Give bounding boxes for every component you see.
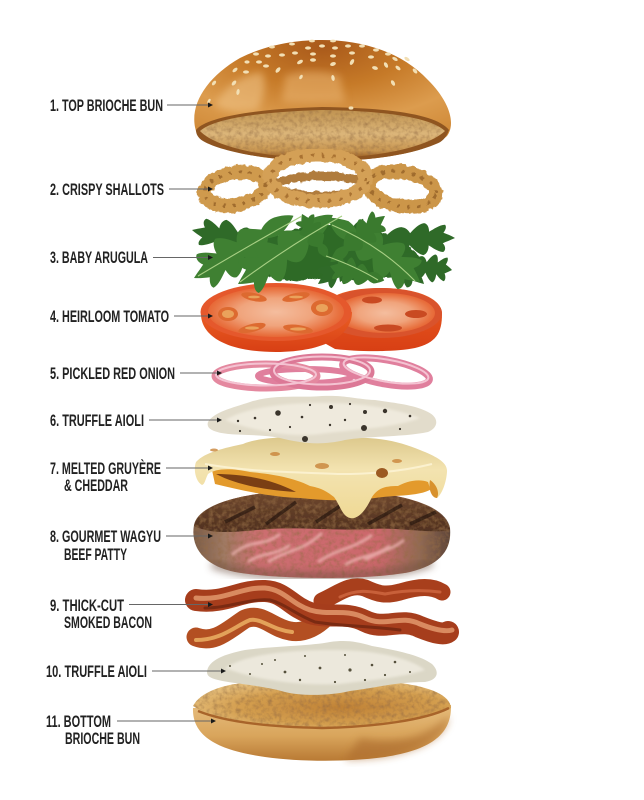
label 2: crispy shallots: 2. CRISPY SHALLOTS [50,181,164,199]
label 11: bottom brioche bun: 11. BOTTOM [46,713,111,731]
crispy shallots [202,155,438,212]
truffle aioli layer 6 [208,396,436,443]
label 7: melted gruyere and cheddar: & CHEDDAR [64,477,128,495]
top brioche bun [194,40,451,161]
melted gruyere and cheddar [195,437,447,518]
label 9: thick-cut smoked bacon: 9. THICK-CUT [50,597,124,615]
thick-cut smoked bacon [196,587,452,640]
label 7: melted gruyere and cheddar: 7. MELTED GRUYÈRE [50,459,161,478]
label 10: truffle aioli: 10. TRUFFLE AIOLI [46,663,147,681]
label 4: heirloom tomato: 4. HEIRLOOM TOMATO [50,308,169,326]
pickled red onion [215,352,431,391]
label 8: gourmet wagyu beef patty [50,528,213,564]
label 9: thick-cut smoked bacon: SMOKED BACON [64,614,152,632]
label 3: baby arugula: 3. BABY ARUGULA [50,249,148,267]
label 6: truffle aioli: 6. TRUFFLE AIOLI [50,412,144,430]
label 9: thick-cut smoked bacon [50,597,213,632]
baby arugula [182,196,456,303]
truffle aioli layer 10 [207,641,437,695]
label 7: melted gruyere and cheddar [50,459,213,495]
sesame seeds [207,40,418,110]
gourmet wagyu beef patty [193,490,450,578]
label 1: top brioche bun: 1. TOP BRIOCHE BUN [50,97,163,115]
bottom brioche bun [193,683,451,761]
heirloom tomato [200,283,442,352]
label 11: bottom brioche bun: BRIOCHE BUN [65,730,140,748]
label 11: bottom brioche bun [46,713,216,748]
label 5: pickled red onion: 5. PICKLED RED ONION [50,365,175,383]
label 8: gourmet wagyu beef patty: BEEF PATTY [64,546,127,564]
label 8: gourmet wagyu beef patty: 8. GOURMET WAGYU [50,528,161,546]
